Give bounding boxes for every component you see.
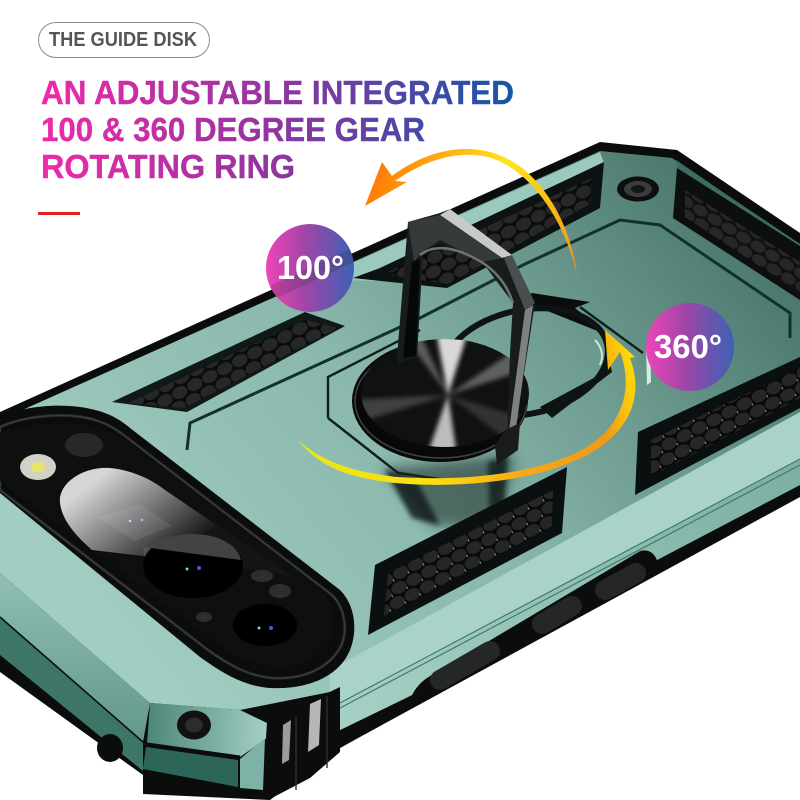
badge: 100 degrees	[266, 224, 354, 312]
lower band below grooves	[340, 459, 800, 730]
lower light strip	[330, 412, 800, 708]
small sensors	[196, 570, 291, 622]
grip: top	[353, 162, 604, 288]
grip: middle left	[112, 312, 345, 412]
headphone port	[97, 734, 123, 762]
camera island	[0, 406, 354, 688]
title: AN ADJUSTABLE INTEGRATED	[41, 74, 514, 111]
badge: 100 degrees: 100°	[277, 249, 344, 286]
arrow: 100 degree	[365, 149, 577, 276]
red accent line	[38, 212, 80, 215]
case teal face	[0, 151, 800, 730]
grip: upper right	[673, 168, 800, 300]
disc rim	[352, 340, 528, 462]
second lens	[233, 604, 297, 646]
badge: 360 degrees	[646, 303, 734, 391]
title: ROTATING RING	[41, 148, 295, 185]
title	[41, 74, 514, 185]
inner panel frame line	[187, 220, 790, 450]
top edge light band	[340, 152, 604, 281]
grip: lower right	[635, 357, 800, 495]
main lens	[143, 534, 243, 598]
bottom corner	[143, 703, 267, 790]
case light strip beside badge	[646, 345, 651, 385]
corner screw	[177, 710, 211, 740]
upper right light band	[676, 160, 800, 262]
square reflection	[97, 504, 172, 541]
badge: 360 degrees: 360°	[654, 328, 722, 365]
arrow: 360 degree	[298, 330, 635, 485]
microphone window	[65, 433, 103, 457]
ring disc	[352, 339, 529, 462]
glass reflection	[60, 468, 293, 577]
camera bezel	[0, 406, 354, 688]
rear ring plate	[432, 294, 618, 430]
ring shadow on case	[382, 455, 515, 530]
title: 100 & 360 DEGREE GEAR	[41, 111, 425, 148]
top screw	[617, 176, 659, 202]
camera glass	[0, 423, 334, 666]
grip: lower centre	[368, 467, 567, 635]
lower edge groove lines	[340, 459, 800, 708]
side buttons	[440, 573, 636, 680]
pill label: the guide disk	[38, 22, 210, 58]
bottom ribs	[264, 687, 340, 800]
ring stand arch	[397, 209, 535, 465]
pill label: the guide disk: THE GUIDE DISK	[49, 29, 197, 51]
lower left side wall	[0, 573, 150, 771]
reflection glints	[129, 520, 131, 522]
flash	[20, 454, 56, 480]
ring recess octagon line	[328, 307, 643, 483]
brushed metal top	[362, 339, 529, 447]
